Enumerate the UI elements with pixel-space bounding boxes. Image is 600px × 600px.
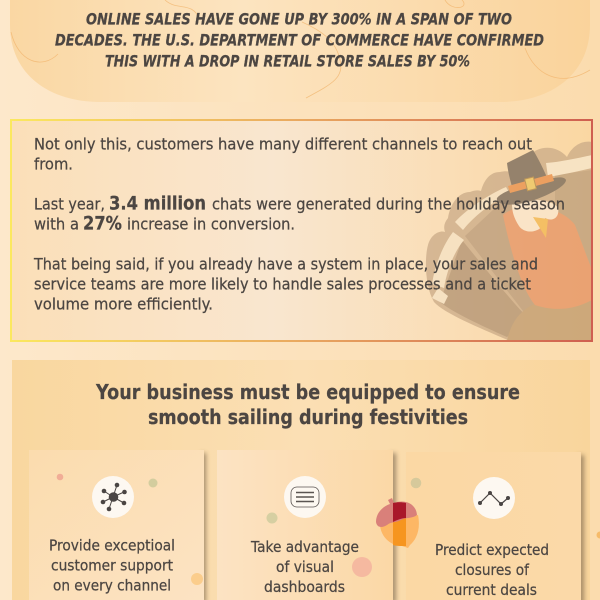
card text: dashboards bbox=[264, 578, 345, 596]
card text: on every channel bbox=[53, 576, 171, 594]
card text: Take advantage bbox=[250, 538, 359, 556]
headline text: THIS WITH A DROP IN RETAIL STORE SALES BY 50% bbox=[105, 52, 470, 70]
icon: network hub bbox=[92, 476, 134, 518]
body text: volume more efficiently. bbox=[34, 294, 213, 314]
card: predict closures bbox=[406, 452, 581, 600]
body text bbox=[33, 134, 565, 314]
card text bbox=[49, 536, 175, 594]
body text: with a bbox=[34, 214, 79, 234]
icon: dashboard bbox=[284, 476, 326, 518]
body text: Not only this, customers have many different channels to reach out bbox=[34, 134, 532, 154]
body text: 27% bbox=[83, 212, 122, 234]
body text: Last year, bbox=[34, 194, 105, 214]
section heading: Your business must be equipped to ensure bbox=[95, 380, 520, 404]
section heading bbox=[95, 380, 520, 429]
panel: business readiness bbox=[12, 360, 600, 600]
card text: Provide exceptioal bbox=[49, 536, 175, 554]
icon: acorn bbox=[376, 498, 419, 548]
icon: line trend bbox=[473, 477, 515, 519]
panel: customer channels statistics bbox=[11, 120, 592, 341]
panel: online sales headline bbox=[10, 0, 590, 102]
card text: closures of bbox=[455, 561, 529, 579]
body text: service teams are more likely to handle sales processes and a ticket bbox=[34, 274, 531, 294]
headline text bbox=[55, 10, 544, 70]
body text: increase in conversion. bbox=[127, 214, 295, 234]
body text: 3.4 million bbox=[109, 192, 206, 214]
body text: chats were generated during the holiday season bbox=[212, 194, 565, 214]
card: customer support bbox=[29, 450, 204, 600]
card text: Predict expected bbox=[435, 541, 549, 559]
section heading: smooth sailing during festivities bbox=[148, 405, 468, 429]
body text: from. bbox=[34, 154, 73, 174]
card shadows bbox=[200, 453, 584, 600]
body text: That being said, if you already have a system in place, your sales and bbox=[33, 254, 538, 274]
card text: customer support bbox=[51, 556, 173, 574]
card text bbox=[435, 541, 549, 599]
headline text: ONLINE SALES HAVE GONE UP BY 300% IN A SPAN OF TWO bbox=[86, 10, 512, 28]
card text: current deals bbox=[446, 581, 537, 599]
card text: of visual bbox=[276, 558, 334, 576]
illustration: pilgrim turkey bbox=[426, 142, 592, 341]
card text bbox=[250, 538, 359, 596]
card: visual dashboards bbox=[217, 450, 393, 600]
